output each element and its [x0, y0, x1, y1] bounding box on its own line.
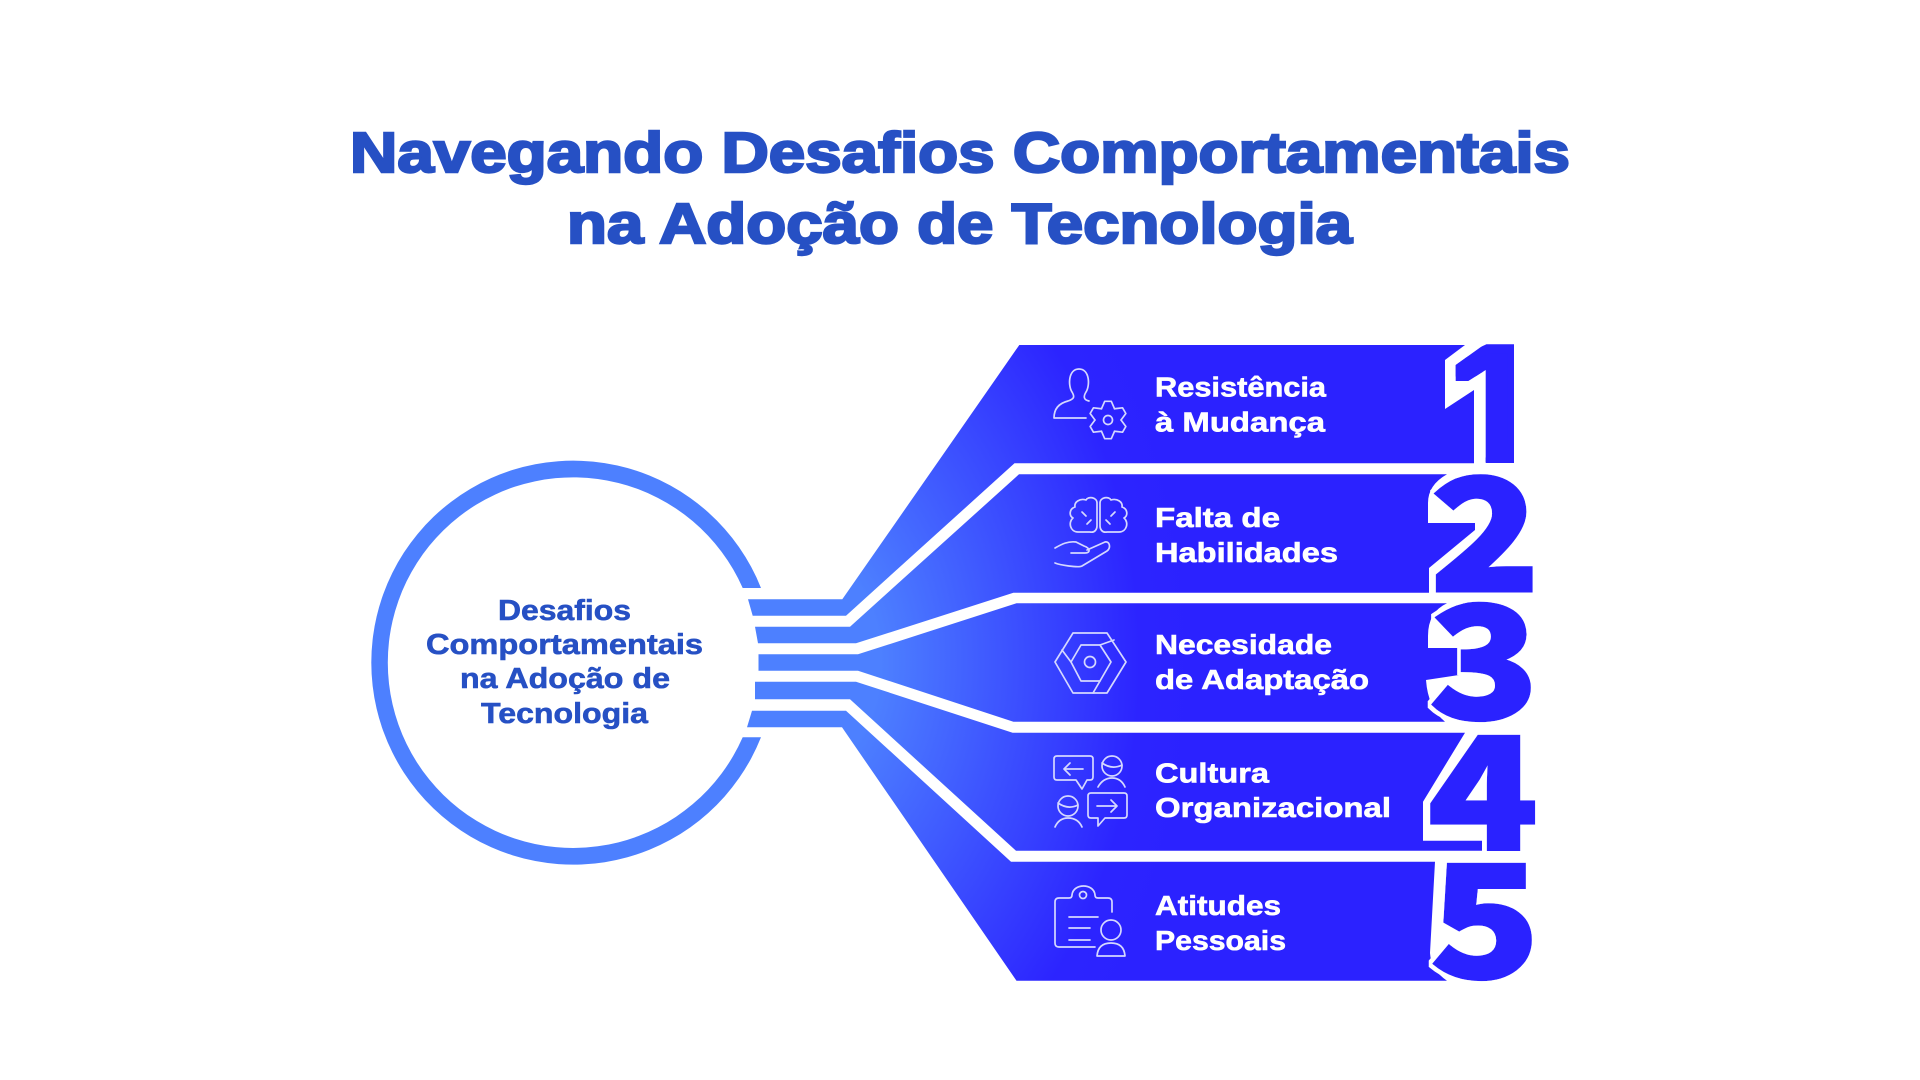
icon: person and gear — [1054, 369, 1127, 439]
label 4: Cultura — [1155, 758, 1269, 789]
label 1 — [1155, 372, 1326, 438]
label 4 — [1155, 758, 1391, 823]
label 3: Necesidade — [1155, 629, 1332, 660]
icon: brain and hand — [1055, 498, 1127, 567]
central circle text — [426, 595, 703, 730]
central circle text: Comportamentais — [426, 629, 703, 661]
number 5: 5 — [1430, 797, 1540, 1023]
band 4 — [755, 669, 1538, 895]
title: na Adoção de Tecnologia — [567, 192, 1353, 256]
label 5: Atitudes — [1155, 890, 1281, 921]
band 3 — [758, 538, 1539, 764]
label 3: de Adaptação — [1155, 664, 1369, 695]
label 5 — [1155, 890, 1286, 956]
label 2 — [1155, 502, 1338, 568]
band 5 — [747, 711, 1540, 1023]
label 2: Habilidades — [1155, 537, 1338, 568]
number 4: 4 — [1428, 669, 1538, 895]
band 1 — [748, 344, 1514, 616]
central circle ring — [371, 461, 761, 865]
number 2: 2 — [1430, 410, 1540, 636]
label 5: Pessoais — [1155, 925, 1286, 956]
label 1: à Mudança — [1155, 407, 1326, 438]
icon: hexagon — [1055, 633, 1126, 693]
label 1: Resistência — [1155, 372, 1326, 403]
icon: dialogue between people — [1054, 756, 1127, 827]
label 4: Organizacional — [1155, 792, 1391, 823]
icon: clipboard and person — [1055, 886, 1125, 956]
number 1: 1 — [1435, 281, 1549, 507]
number 3: 3 — [1429, 538, 1539, 764]
central circle text: Desafios — [498, 595, 631, 627]
title — [350, 121, 1570, 256]
title: Navegando Desafios Comportamentais — [350, 121, 1570, 185]
band 2 — [755, 410, 1540, 643]
label 2: Falta de — [1155, 502, 1280, 533]
central circle text: Tecnologia — [481, 698, 649, 730]
label 3 — [1155, 629, 1369, 695]
central circle text: na Adoção de — [460, 663, 670, 695]
